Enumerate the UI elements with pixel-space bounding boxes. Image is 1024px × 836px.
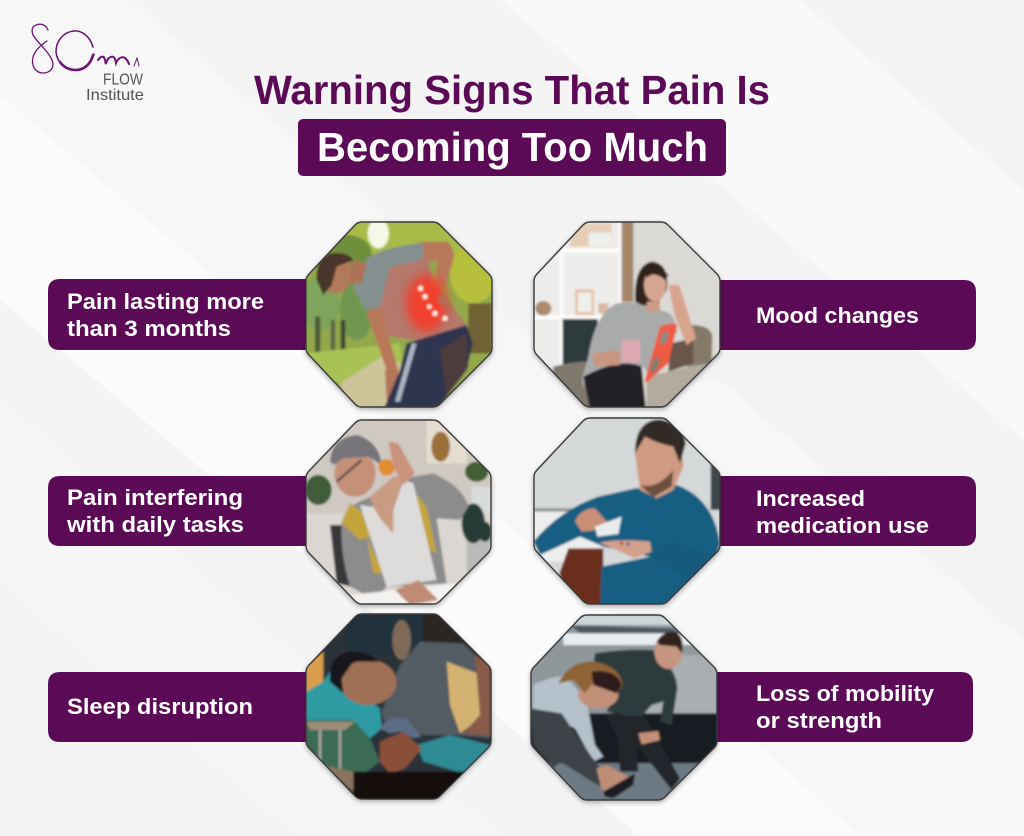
label: Loss of mobility or strength: Loss of mobility: [756, 681, 935, 706]
photo: woman and man stretching outdoors: [528, 614, 720, 806]
label: Sleep disruption: Sleep disruption: [67, 694, 253, 719]
label: Increased medication use: Increased: [756, 486, 865, 511]
label: Pain lasting more than 3 months: [48, 279, 320, 350]
label: Pain interfering with daily tasks: [48, 476, 320, 546]
label: Increased medication use: medication use: [756, 513, 929, 538]
label: Increased medication use: [710, 476, 976, 546]
label: Mood changes: [710, 280, 976, 350]
label: Mood changes: Mood changes: [756, 303, 919, 328]
label: Loss of mobility or strength: or strength: [756, 708, 882, 733]
label: Pain lasting more than 3 months: Pain lasting more: [67, 289, 264, 314]
photo: woman looking upset on a sofa: [530, 220, 724, 412]
label: Pain interfering with daily tasks: Pain interfering: [67, 485, 243, 510]
label: Loss of mobility or strength: [707, 672, 973, 742]
photo: man sleeping with teal pillows: [302, 612, 494, 804]
photo: man pouring pills into his hand: [530, 416, 724, 610]
title line 1: Warning Signs That Pain Is: [254, 67, 770, 113]
logo: Som Flow Institute: Institute: [86, 87, 144, 104]
label: Pain interfering with daily tasks: with daily tasks: [66, 512, 244, 537]
label: Pain lasting more than 3 months: than 3 months: [67, 316, 231, 341]
label: Sleep disruption: [48, 672, 320, 742]
photo: woman with neck pain at a desk: [302, 418, 494, 610]
photo: man holding his lower back in a park: [302, 220, 496, 412]
title highlight: Becoming Too Much: Becoming Too Much: [317, 124, 708, 170]
logo: Som Flow Institute: [32, 24, 144, 104]
logo: Som Flow Institute: FLOW: [103, 72, 144, 88]
